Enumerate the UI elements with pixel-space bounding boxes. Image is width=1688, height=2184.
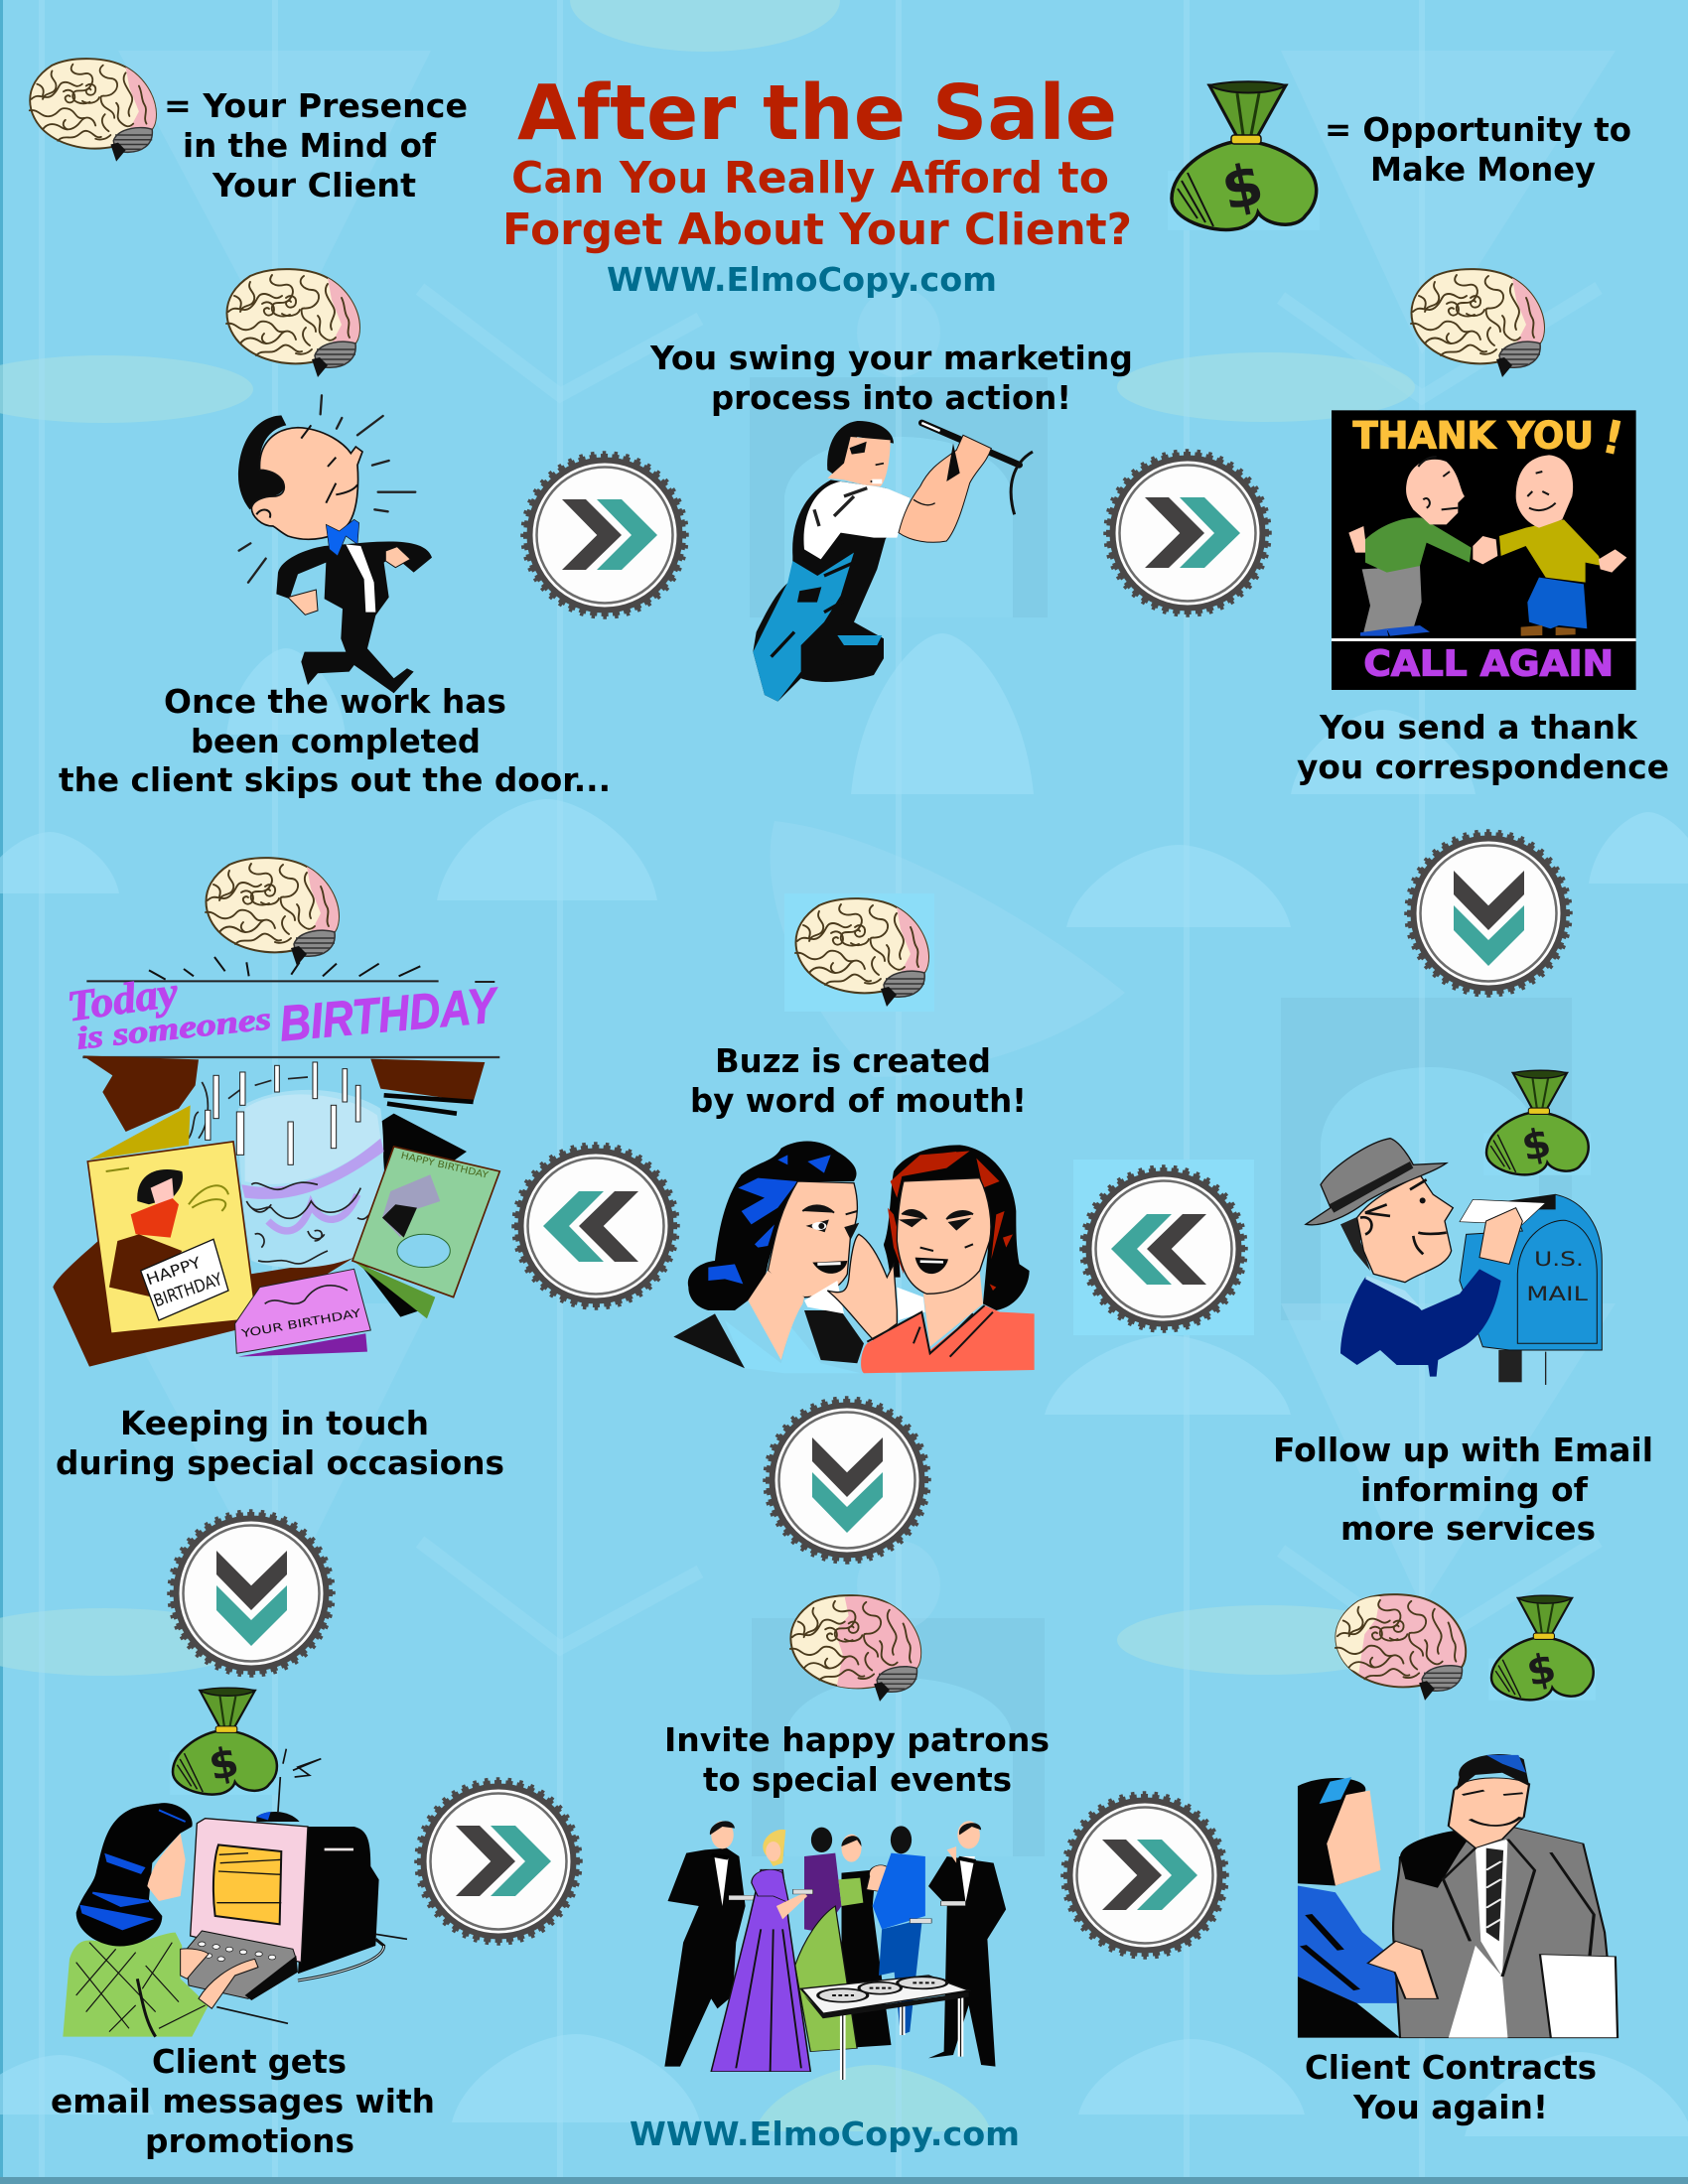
legend text: presence [164, 86, 468, 205]
arrow badge: step 3 to 4 [1406, 831, 1571, 996]
illustration: party guests [664, 1821, 1006, 2080]
step text: special events: Invite happy patrons [664, 1720, 1050, 1759]
illustration: two women gossiping [673, 1142, 1035, 1373]
card text: call again: CALL AGAIN [1363, 644, 1614, 685]
step text: email promotions [51, 2042, 435, 2160]
icons: brain and money bag step 10 [1336, 1594, 1596, 1701]
icon: brain step 3 [1411, 269, 1544, 377]
birthday headline text: is someones [74, 1000, 273, 1056]
step text: email promotions: email messages with [51, 2082, 435, 2120]
sign text: happy birthday: BIRTHDAY [151, 1270, 225, 1311]
step text: marketing process: process into action! [711, 378, 1071, 417]
title block [502, 69, 1132, 299]
arrow badge: step 6 to 8 [169, 1511, 334, 1676]
arrow badge: step 4 to 5 [1073, 1160, 1254, 1335]
footer website url: WWW.ElmoCopy.com [630, 2115, 1020, 2153]
step text: follow up: informing of [1360, 1470, 1589, 1509]
card text: green card: HAPPY BIRTHDAY [400, 1151, 490, 1181]
step text: client contracts: Client Contracts [1305, 2048, 1597, 2087]
illustration: client skipping [238, 395, 432, 693]
mailbox text: U.S. [1534, 1248, 1584, 1271]
illustration: thank you card [1332, 410, 1636, 690]
subtitle: Can You Really Afford to [511, 154, 1109, 204]
website url: WWW.ElmoCopy.com [607, 260, 997, 299]
step text: client skips: been completed [191, 722, 481, 760]
step text: email promotions: promotions [145, 2121, 354, 2160]
icon: money bag step 4 [1483, 1070, 1591, 1175]
step text: marketing process: You swing your marketing [649, 339, 1133, 377]
step text: thank you: You send a thank [1319, 708, 1638, 747]
step text: follow up: Follow up with Email [1273, 1431, 1653, 1469]
illustration: birthday cards [53, 957, 502, 1367]
icon: brain step 9 [790, 1595, 920, 1702]
step text: special events [664, 1720, 1050, 1799]
icon: brain step 5 [784, 893, 934, 1012]
legend text: presence: in the Mind of [183, 126, 437, 165]
subtitle [502, 154, 1132, 255]
icon: money bag step 8 [170, 1688, 279, 1795]
step text: special occasions: Keeping in touch [120, 1404, 429, 1442]
step text: marketing process [649, 339, 1133, 417]
birthday headline text [65, 968, 502, 1056]
step text: buzz: Buzz is created [715, 1041, 991, 1080]
card text: thank you: THANK YOU [1353, 414, 1594, 458]
step text: client contracts [1305, 2048, 1597, 2126]
step text: follow up [1273, 1431, 1653, 1548]
card text: thank you [1353, 410, 1628, 467]
step text: client skips: Once the work has [164, 682, 506, 721]
sign text: happy birthday [144, 1249, 225, 1311]
step text: client skips: the client skips out the door... [59, 760, 611, 799]
legend text: opportunity [1325, 110, 1631, 189]
step text: special occasions: during special occasions [56, 1443, 504, 1482]
sign text: happy birthday: HAPPY [144, 1254, 204, 1289]
birthday headline text: Today [65, 968, 182, 1030]
step text: buzz [690, 1041, 1027, 1120]
mailbox text: MAIL [1526, 1283, 1588, 1305]
icon: brain step 1 [226, 269, 359, 377]
illustration: man swinging hammer [753, 421, 1033, 702]
card text: your birthday: YOUR BIRTHDAY [239, 1305, 361, 1340]
main heading: After the Sale [517, 69, 1117, 158]
legend: money bag means opportunity [1168, 81, 1631, 230]
illustration: man mailing letter [1306, 1139, 1602, 1385]
arrow badge: step 1 to 2 [522, 453, 687, 617]
arrow badge: step 9 to 10 [1062, 1793, 1227, 1958]
step text: follow up: more services [1340, 1509, 1596, 1548]
step text: email promotions: Client gets [152, 2042, 347, 2081]
step text: client skips [59, 682, 611, 799]
step text: thank you: you correspondence [1297, 748, 1669, 786]
legend text: opportunity: Make Money [1370, 150, 1596, 189]
step text: client contracts: You again! [1352, 2088, 1548, 2126]
icon: money bag legend [1168, 81, 1320, 230]
legend text: presence: Your Client [211, 166, 416, 205]
step text: buzz: by word of mouth! [690, 1081, 1027, 1120]
arrow badge: step 5 to 7 [765, 1398, 929, 1563]
arrow badge: step 8 to 9 [416, 1779, 581, 1944]
legend text: presence: = Your Presence [164, 86, 468, 125]
illustration: client handshake [1298, 1754, 1618, 2038]
icon: brain legend [30, 59, 156, 162]
legend text: opportunity: = Opportunity to [1325, 110, 1631, 149]
step text: special occasions [56, 1404, 504, 1482]
birthday headline text: BIRTHDAY [277, 977, 502, 1051]
mailbox text [1526, 1248, 1588, 1305]
subtitle: Forget About Your Client? [502, 205, 1132, 255]
card text: thank you: ! [1597, 410, 1628, 467]
step text: special events: to special events [703, 1760, 1012, 1799]
illustration: woman at computer [63, 1749, 407, 2037]
step text: thank you [1297, 708, 1669, 786]
arrow badge: step 5 to 6 [513, 1144, 678, 1308]
arrow badge: step 2 to 3 [1105, 451, 1270, 615]
legend: brain means presence in the client's mind [30, 59, 468, 205]
icon: brain step 6 [206, 858, 339, 966]
